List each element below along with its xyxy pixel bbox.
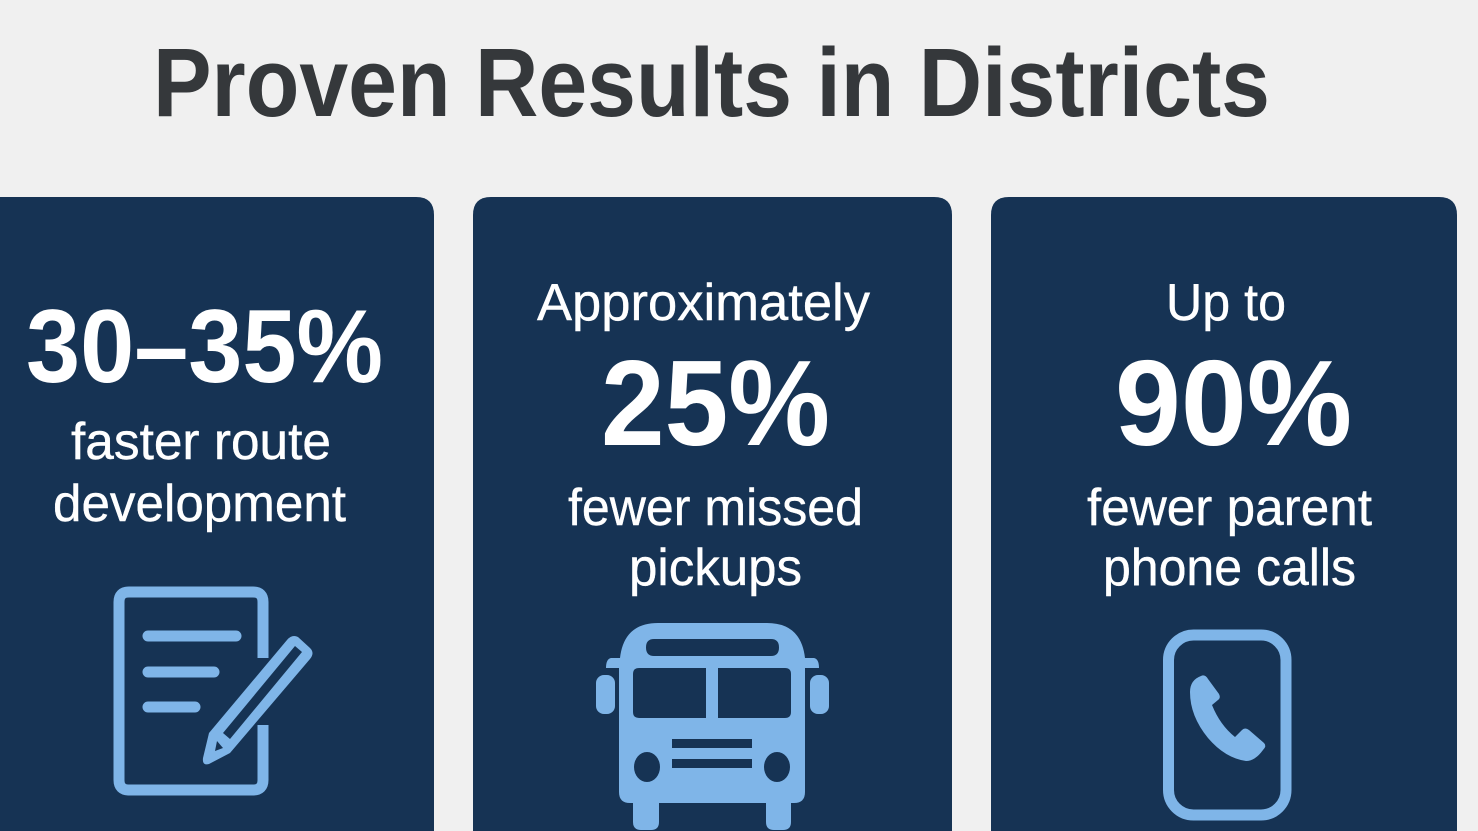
panel: route development bbox=[0, 197, 434, 831]
text: Approximately: Approximately bbox=[537, 274, 870, 332]
panel: parent phone calls bbox=[991, 197, 1457, 831]
icon: phone bbox=[1168, 635, 1286, 815]
text: Up to: Up to bbox=[1166, 274, 1286, 332]
text: faster route development: development bbox=[53, 475, 347, 533]
text: fewer missed pickups: pickups bbox=[629, 539, 802, 597]
icon: bus bbox=[596, 623, 829, 830]
icon: document with pencil bbox=[119, 592, 312, 790]
title: Proven Results in Districts bbox=[153, 28, 1270, 137]
text: fewer parent phone calls: fewer parent bbox=[1087, 479, 1373, 537]
text: faster route development bbox=[53, 413, 347, 533]
text: fewer missed pickups bbox=[568, 479, 863, 597]
text: fewer parent phone calls bbox=[1087, 479, 1373, 597]
text: fewer missed pickups: fewer missed bbox=[568, 479, 863, 537]
panel: missed pickups bbox=[473, 197, 952, 831]
stat: 25%: 25% bbox=[601, 335, 830, 471]
text: fewer parent phone calls: phone calls bbox=[1103, 539, 1356, 597]
stat: 30–35%: 30–35% bbox=[26, 289, 383, 405]
text: faster route development: faster route bbox=[71, 413, 331, 471]
stat: 90%: 90% bbox=[1115, 335, 1352, 471]
